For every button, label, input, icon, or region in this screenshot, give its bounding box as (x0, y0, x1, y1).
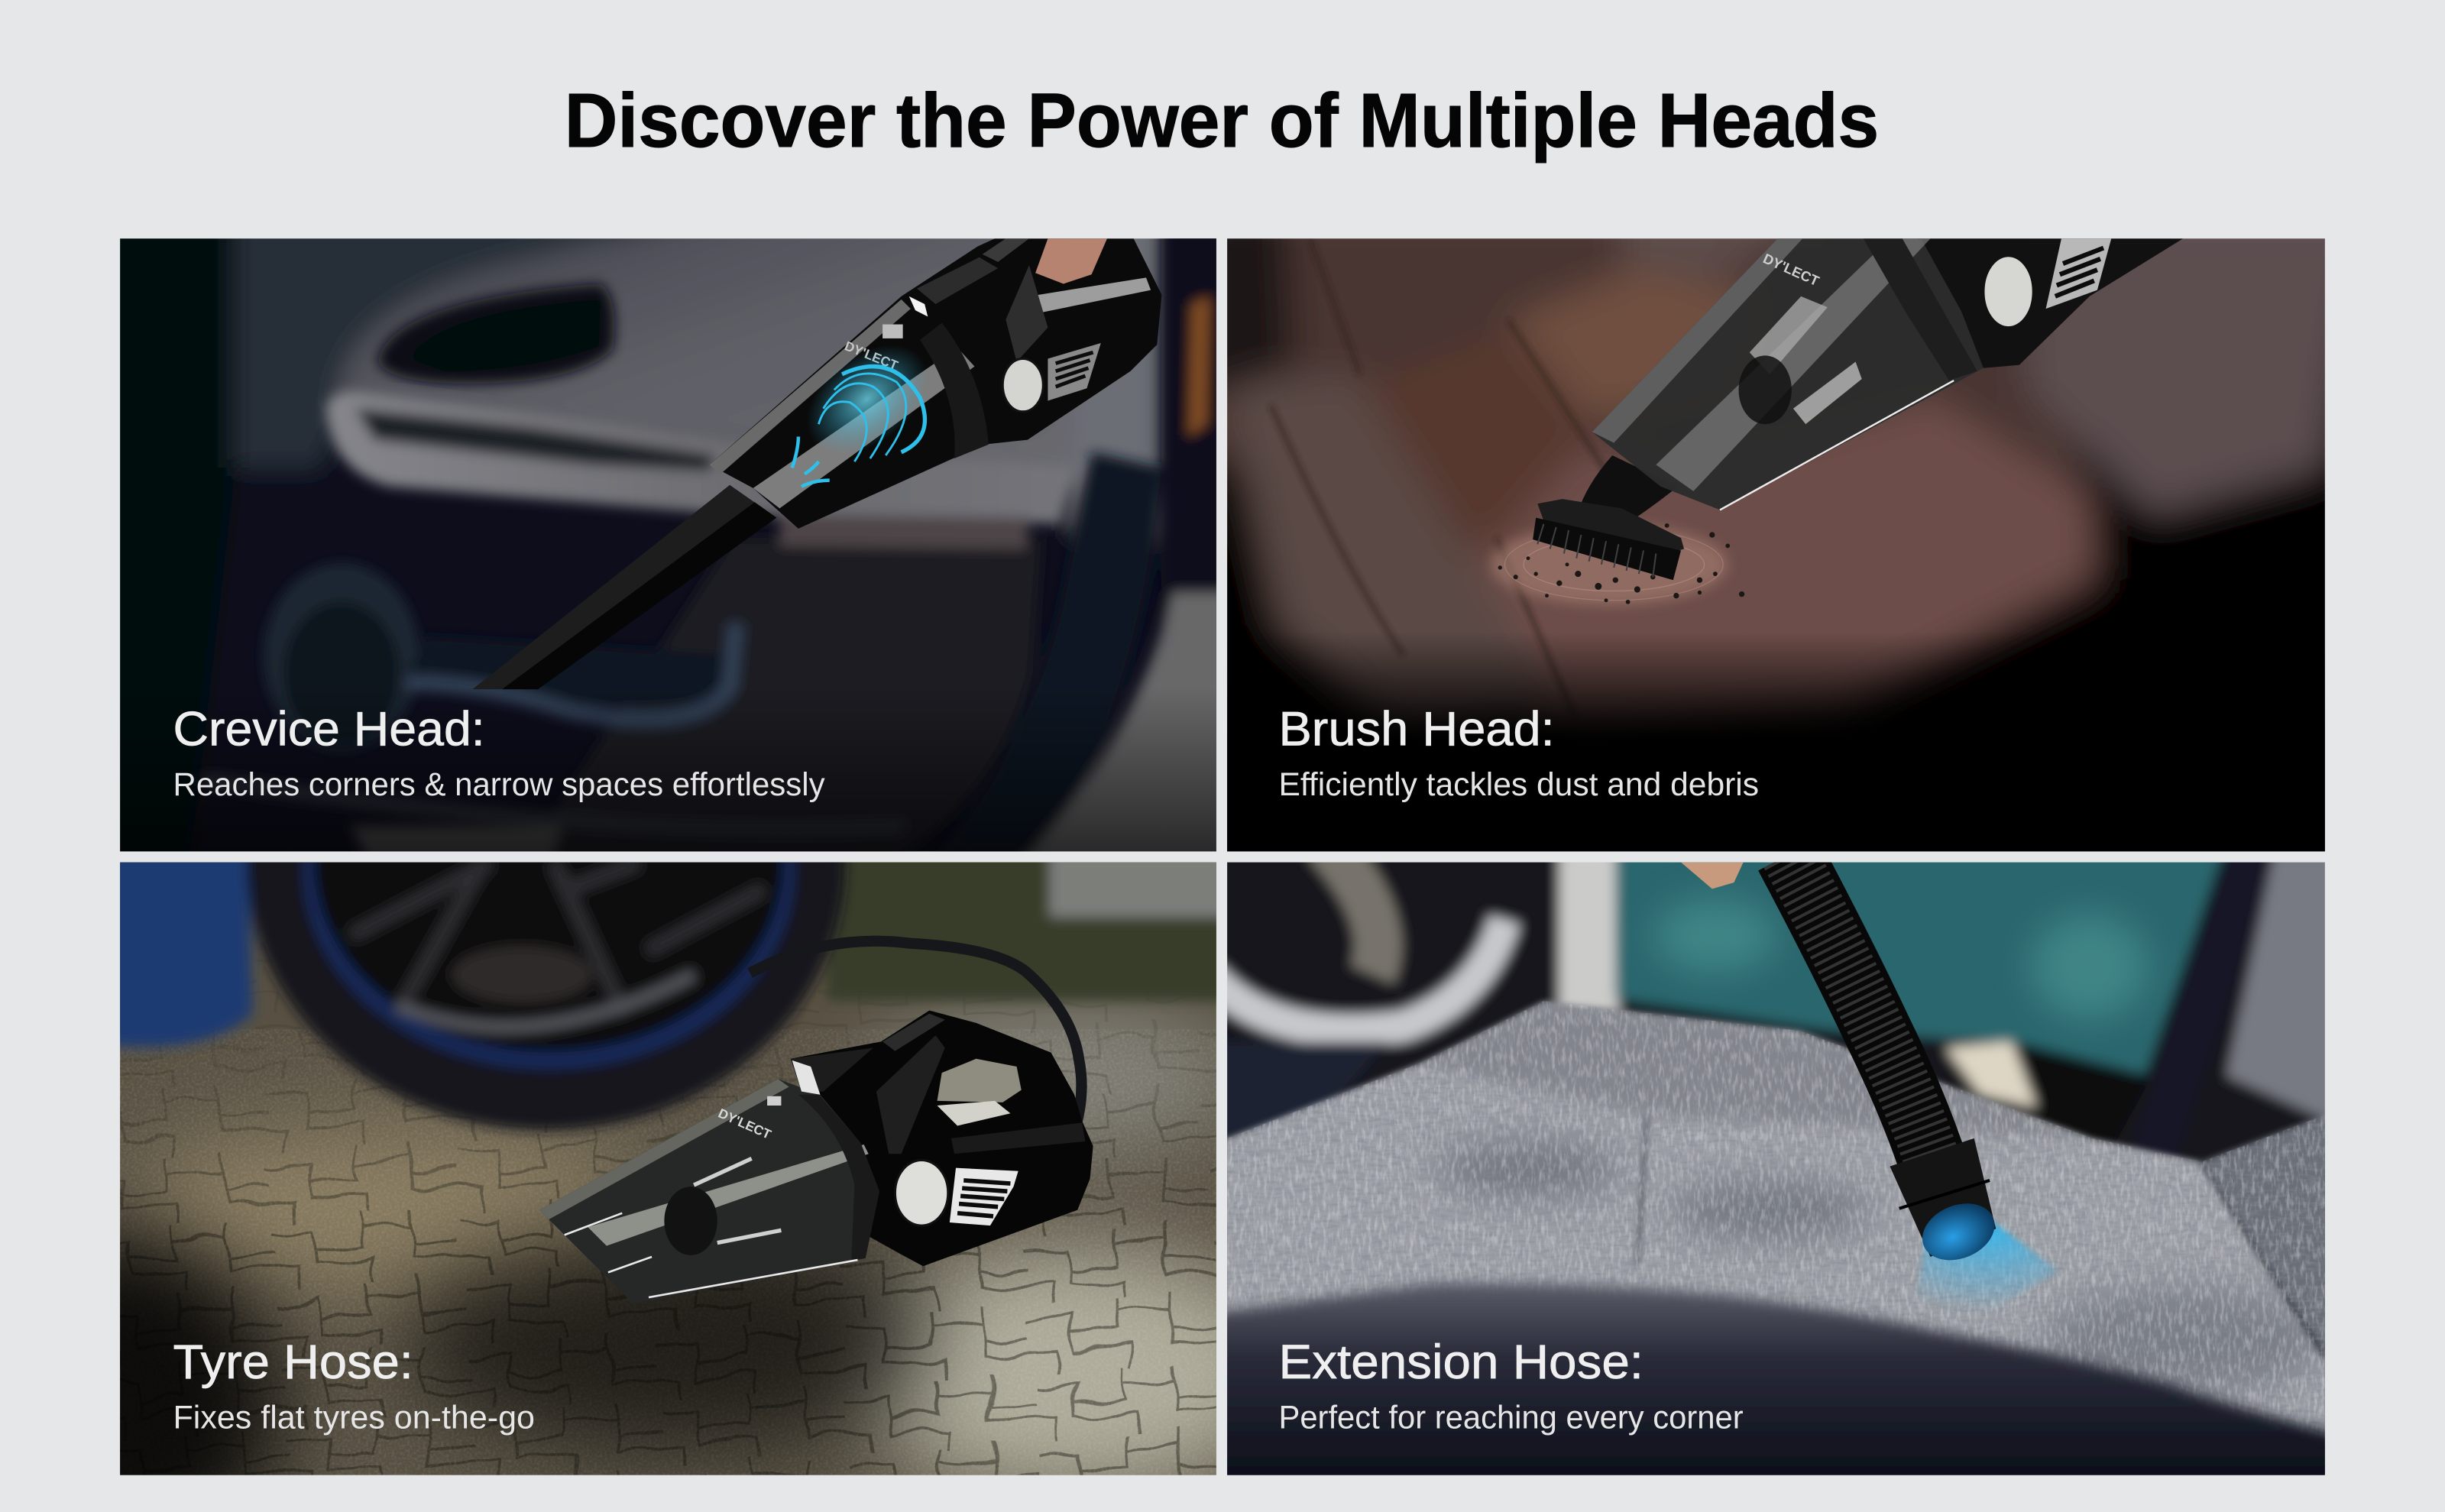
photo: grass and wall (827, 827, 1268, 1001)
description: brush head: Efficiently tackles dust and debris (1278, 766, 1759, 803)
icon: vent grille (1048, 343, 1101, 401)
dust ring on seat (1491, 524, 1728, 605)
icon: vacuum (539, 1011, 1093, 1303)
description: crevice head: Reaches corners & narrow spaces effortlessly (173, 766, 825, 803)
icon: pressure gauge (1002, 358, 1043, 412)
icon: vent grille (950, 1168, 1018, 1225)
heading: crevice head: Crevice Head: (173, 703, 485, 756)
icon: vent grille (2046, 238, 2111, 309)
panel: crevice head (120, 238, 1216, 851)
seat fabric (1185, 983, 2370, 1512)
icon: brush head (1533, 455, 1684, 580)
icon: vacuum body (1592, 238, 2183, 510)
description: tyre hose: Fixes flat tyres on-the-go (173, 1399, 535, 1436)
icon: vacuum body: DY'LECT (1760, 250, 1822, 290)
photo: paved ground (78, 827, 1294, 1512)
lower dark fade (1227, 632, 2325, 740)
icon: blue air stream (1915, 1224, 2058, 1313)
heading: tyre hose: Tyre Hose: (173, 1336, 413, 1389)
panel: brush head (1185, 202, 2370, 889)
icon: vacuum body (710, 238, 1161, 529)
seat stitching and seams (1271, 238, 1614, 717)
panel: tyre hose (0, 594, 1294, 1512)
hose cable (750, 941, 1082, 1126)
photo: car wheel (78, 594, 845, 1131)
shadow gradient (120, 708, 1216, 851)
lower black band (1227, 740, 2325, 851)
passenger shirt highlights (1653, 898, 2149, 1020)
icon: dust particles (1498, 523, 1744, 604)
icon: pressure gauge (1984, 256, 2033, 328)
icon: vacuum body: DY'LECT (843, 338, 901, 374)
shadow under vacuum (406, 1232, 935, 1450)
fabric weave texture (1227, 998, 2325, 1475)
icon: corrugated hose (1789, 854, 1935, 1170)
description: extension hose: Perfect for reaching every corner (1278, 1399, 1744, 1436)
icon: vacuum: DY'LECT (716, 1106, 774, 1142)
title: Discover the Power of Multiple Heads (565, 78, 1879, 164)
heading: extension hose: Extension Hose: (1278, 1336, 1643, 1389)
photo: car door backdrop (120, 238, 1216, 851)
icon: hose nozzle (1890, 1138, 2003, 1271)
left vignette (0, 1232, 280, 1512)
icon: crevice tool (472, 485, 776, 689)
photo: leather car seat (1185, 202, 2370, 889)
hand (1681, 863, 1744, 889)
icon: pressure gauge (895, 1160, 948, 1225)
photo: car interior (1185, 827, 2370, 1512)
panel: extension hose (1185, 827, 2370, 1512)
seat front bolster (1185, 1283, 2370, 1512)
icon: blue airflow (786, 322, 948, 487)
heading: brush head: Brush Head: (1278, 703, 1555, 756)
photo: car door interior (202, 238, 1216, 851)
